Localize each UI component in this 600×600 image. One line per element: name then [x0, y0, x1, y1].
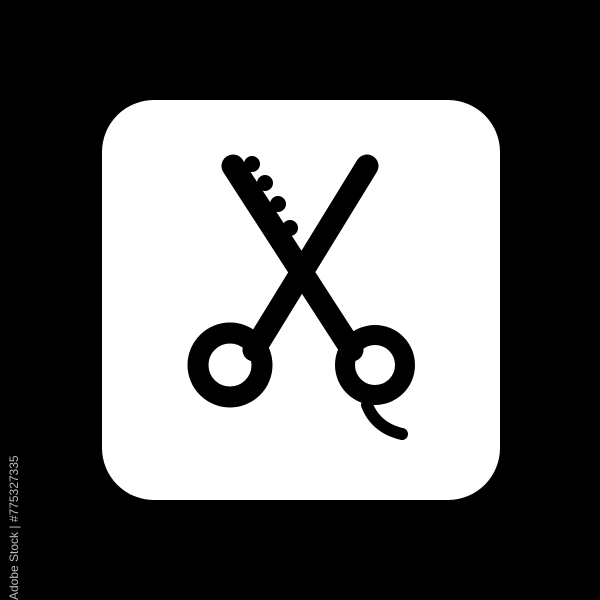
- icon: scissors: [198, 156, 405, 434]
- white rounded square: [102, 100, 500, 500]
- blade with teeth: [233, 156, 352, 350]
- watermark id text: Adobe Stock | #775327335: [7, 455, 21, 600]
- right ring with tail: [345, 335, 405, 434]
- left ring: [198, 333, 262, 397]
- straight blade: [254, 166, 367, 350]
